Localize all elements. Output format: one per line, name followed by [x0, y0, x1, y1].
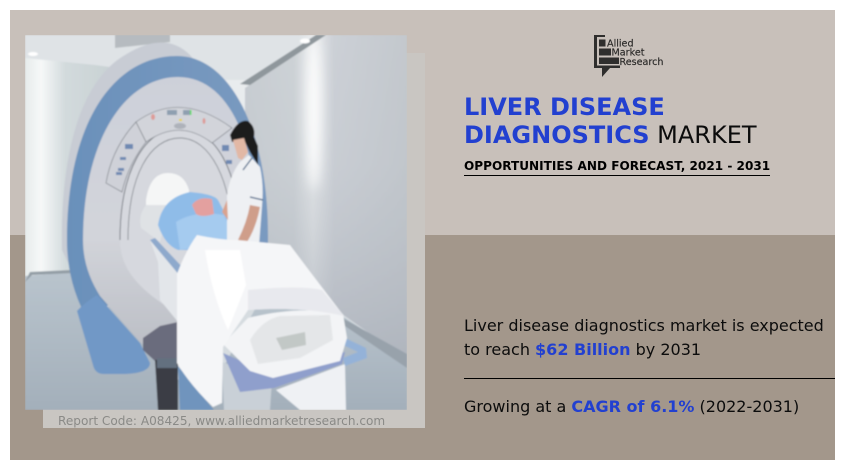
- caption: report code: Report Code: A08425, www.alliedmarketresearch.com: [58, 414, 385, 428]
- control lights: [167, 110, 177, 115]
- title: DIAGNOSTICS MARKET: [464, 121, 757, 149]
- table foot and base: [143, 322, 178, 361]
- market size statement: to reach $62 Billion by 2031: [464, 340, 701, 359]
- title: LIVER DISEASE: [464, 93, 665, 121]
- panel: offset backing card: [43, 53, 425, 428]
- logo wordmark: [607, 38, 664, 68]
- logo wordmark: Market: [612, 48, 645, 58]
- table rail and side: [150, 240, 178, 322]
- white sheet: [177, 235, 344, 407]
- logo wordmark: Research: [620, 57, 664, 68]
- CAGR statement: Growing at a CAGR of 6.1% (2022-2031): [464, 397, 799, 416]
- title: [464, 93, 757, 149]
- panel: lower background: [10, 235, 835, 460]
- market size statement: Liver disease diagnostics market is expected: [464, 316, 824, 335]
- scanner face: [83, 77, 258, 344]
- room: [25, 35, 407, 410]
- subtitle with underline: OPPORTUNITIES AND FORECAST, 2021 - 2031: [464, 159, 770, 173]
- scanner blue base: [77, 295, 150, 374]
- photo: MRI scanner with nurse and patient: [25, 35, 407, 410]
- scanner blue ring: [67, 56, 268, 315]
- patient drape: [158, 192, 240, 250]
- icon: speech bubble bars: [594, 35, 620, 77]
- bore and pillow: [146, 173, 190, 230]
- table head block: [223, 352, 345, 392]
- divider: [464, 378, 835, 379]
- nurse: [222, 121, 263, 246]
- panel: upper background: [10, 10, 835, 235]
- market size statement: [464, 316, 824, 359]
- logo wordmark: Allied: [607, 38, 634, 50]
- scanner housing: [115, 35, 170, 48]
- logo: Allied Market Research: [594, 35, 664, 77]
